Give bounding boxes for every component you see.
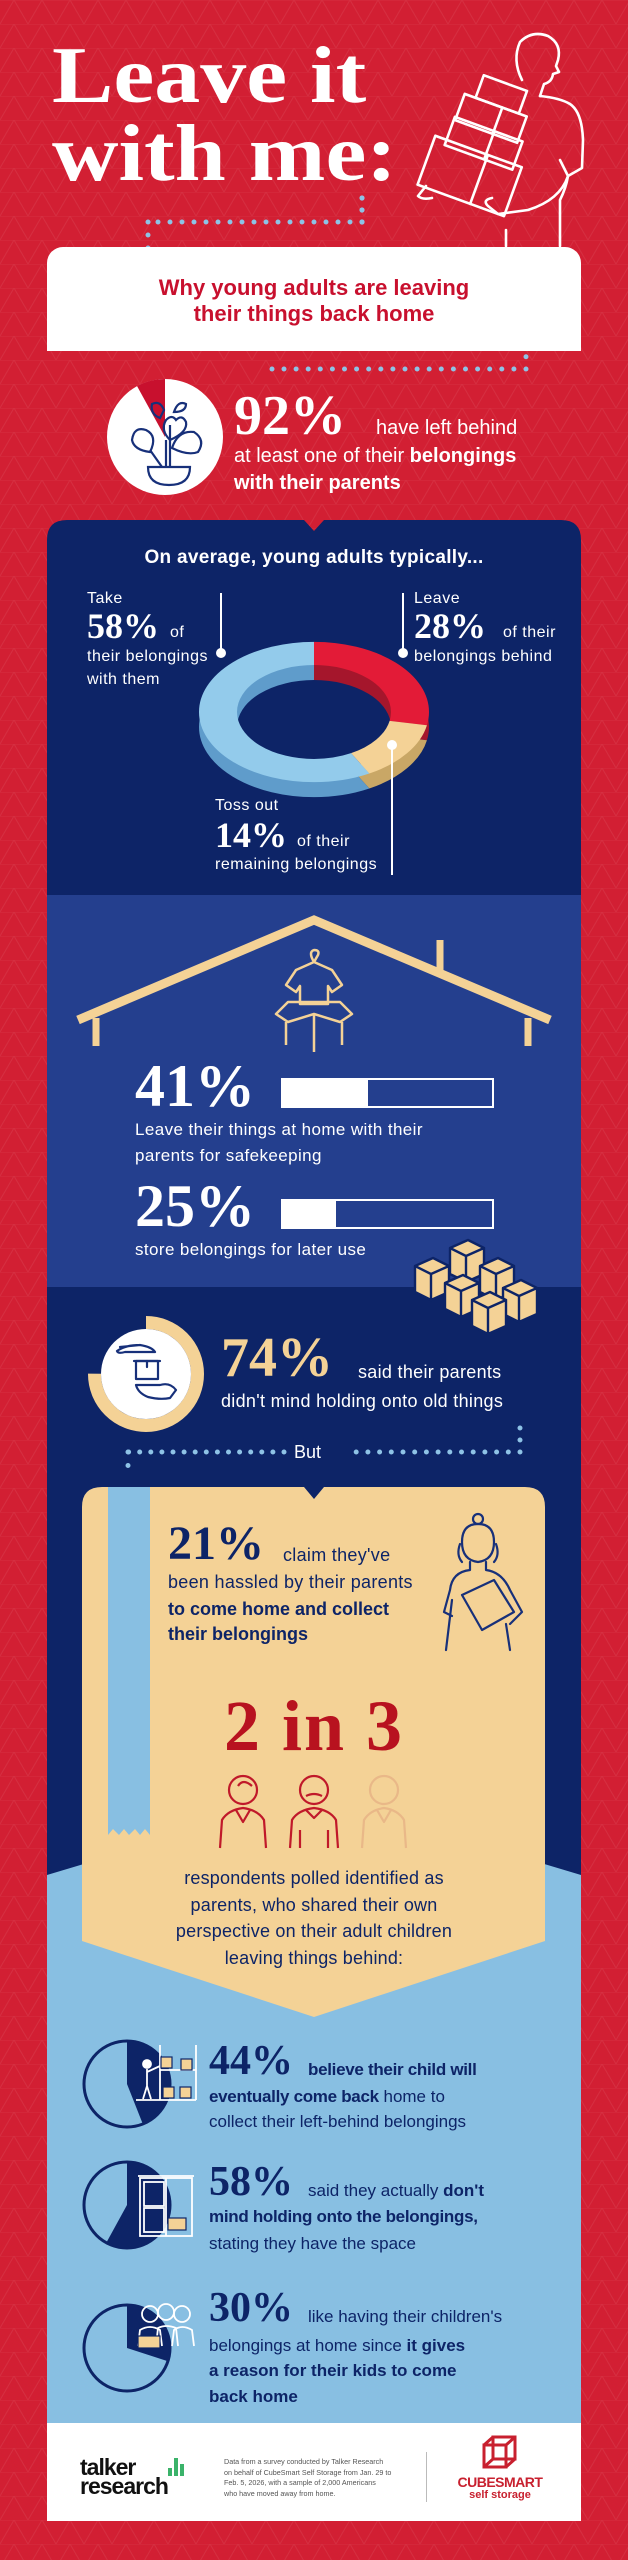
icon: woman with box: [442, 1512, 524, 1652]
stat: 30%: a reason for their kids to come: [209, 2361, 457, 2380]
logo: talker research: talker: [80, 2454, 135, 2480]
stat: 92%: [234, 385, 517, 494]
text: respondents: perspective on their adult children: [176, 1921, 452, 1941]
text: respondents: parents, who shared their own: [191, 1894, 437, 1914]
stat: 74%: 74%: [221, 1327, 333, 1389]
stat: 58%: mind holding onto the belongings,: [209, 2207, 478, 2226]
logo: talker research: research: [80, 2473, 168, 2499]
disclaimer: Data from a survey conducted by Talker Research: [224, 2457, 383, 2466]
label: leave 28%: belongings behind: [414, 648, 552, 665]
text: respondents: [176, 1868, 452, 1968]
stat: 44%: [209, 2038, 477, 2131]
label: take 58%: Take: [87, 590, 123, 607]
text: respondents: leaving things behind:: [225, 1948, 403, 1968]
stat: 41% bar: parents for safekeeping: [135, 1146, 322, 1165]
stat: 25% bar: [135, 1173, 494, 1259]
connector dots top: [146, 195, 528, 372]
icon: plant pie: [107, 379, 223, 495]
stat: 44%: 44%: [209, 2038, 293, 2084]
label: take 58%: [87, 590, 208, 688]
stat: 21%: their belongings: [168, 1624, 308, 1644]
text: respondents: respondents polled identified as: [184, 1868, 444, 1888]
text: But: [294, 1442, 321, 1462]
logo: cubesmart: self storage: [469, 2489, 531, 2501]
stat: 30%: like having their children's: [308, 2307, 502, 2326]
pie: 58%: [84, 2162, 170, 2248]
stat: 21%: been hassled by their parents: [168, 1572, 413, 1592]
logo: cubesmart: [458, 2436, 543, 2501]
bar 41%: [281, 1078, 494, 1108]
label: toss out 14%: remaining belongings: [215, 856, 377, 873]
icon: man carrying boxes: [416, 32, 584, 247]
title: [52, 32, 397, 198]
label: leave 28%: [414, 590, 556, 665]
stat: 92%: 92%: [234, 385, 346, 447]
stat: 41% bar: [135, 1053, 494, 1165]
stat: 44%: collect their left-behind belongings: [209, 2112, 466, 2131]
label: take 58%: 58%: [87, 606, 159, 646]
stat: 41% bar: Leave their things at home with their: [135, 1120, 423, 1139]
disclaimer: Feb. 5, 2026, with a sample of 2,000 Americans: [224, 2478, 376, 2487]
stat: 30%: back home: [209, 2387, 298, 2406]
stat: 58%: [209, 2159, 484, 2253]
title: Leave it: [52, 32, 366, 120]
stat: 25% bar: 25%: [135, 1173, 255, 1239]
label: take 58%: their belongings: [87, 648, 208, 665]
stat: 21%: [168, 1517, 413, 1644]
stat: 44%: eventually come back home to: [209, 2087, 445, 2106]
stat: 21%: 21%: [168, 1517, 264, 1570]
disclaimer: [224, 2457, 392, 2498]
subtitle box: [47, 247, 581, 351]
logo: talker research: [80, 2454, 184, 2499]
icon: 74% ring with hands: [88, 1316, 204, 1432]
icon: stacked boxes: [414, 1238, 538, 1332]
stat: 30%: 30%: [209, 2285, 293, 2331]
stat: 74%: said their parents: [358, 1362, 501, 1382]
stat: 30%: [209, 2285, 502, 2406]
label: take 58%: with them: [87, 671, 160, 688]
bar 25%: [281, 1199, 494, 1229]
ribbon: [108, 1487, 150, 1835]
stat: 58%: 58%: [209, 2159, 293, 2205]
stat: 58%: stating they have the space: [209, 2234, 416, 2253]
subtitle text: Why young adults are leaving: [159, 275, 469, 300]
label: toss out 14%: of their: [297, 833, 350, 850]
subtitle text: their things back home: [194, 301, 434, 326]
stat: 25% bar: store belongings for later use: [135, 1240, 366, 1259]
stat: 41% bar: 41%: [135, 1053, 255, 1119]
label: toss out 14%: 14%: [215, 815, 287, 855]
disclaimer: who have moved away from home.: [224, 2488, 335, 2498]
stat: 74%: didn't mind holding onto old things: [221, 1391, 503, 1411]
label: take 58%: of: [170, 624, 184, 641]
label: leave 28%: of their: [503, 624, 556, 641]
heading: on average: On average, young adults typically...: [144, 547, 484, 568]
label: toss out 14%: [215, 797, 377, 873]
logo: cubesmart: CUBESMART: [458, 2474, 542, 2490]
stat: 92%: at least one of their belongings: [234, 445, 516, 467]
footer: [47, 2423, 581, 2521]
icon: house roof with shirt: [76, 915, 552, 1052]
label: leave 28%: Leave: [414, 590, 460, 607]
subtitle text: [158, 275, 469, 326]
label: leave 28%: 28%: [414, 606, 486, 646]
stat: 92%: have left behind: [376, 417, 517, 439]
stat: 58%: said they actually don't: [308, 2181, 484, 2200]
stat: 92%: with their parents: [234, 472, 401, 494]
disclaimer: on behalf of CubeSmart Self Storage from Jan. 29 to: [224, 2468, 391, 2476]
stat: 30%: belongings at home since it gives: [209, 2336, 465, 2355]
stat: 2 in 3: 2 in 3: [224, 1686, 404, 1766]
pie: 30%: [84, 2305, 170, 2391]
stat: 74%: [221, 1327, 503, 1411]
title: with me:: [52, 110, 397, 198]
icon: three parents: [218, 1774, 407, 1848]
connector: But: [126, 1426, 522, 1468]
chart: donut: [199, 593, 429, 875]
label: toss out 14%: Toss out: [215, 797, 279, 814]
stat: 21%: claim they've: [283, 1545, 390, 1565]
stat: 44%: believe their child will: [308, 2060, 477, 2079]
stat: 21%: to come home and collect: [168, 1599, 389, 1619]
